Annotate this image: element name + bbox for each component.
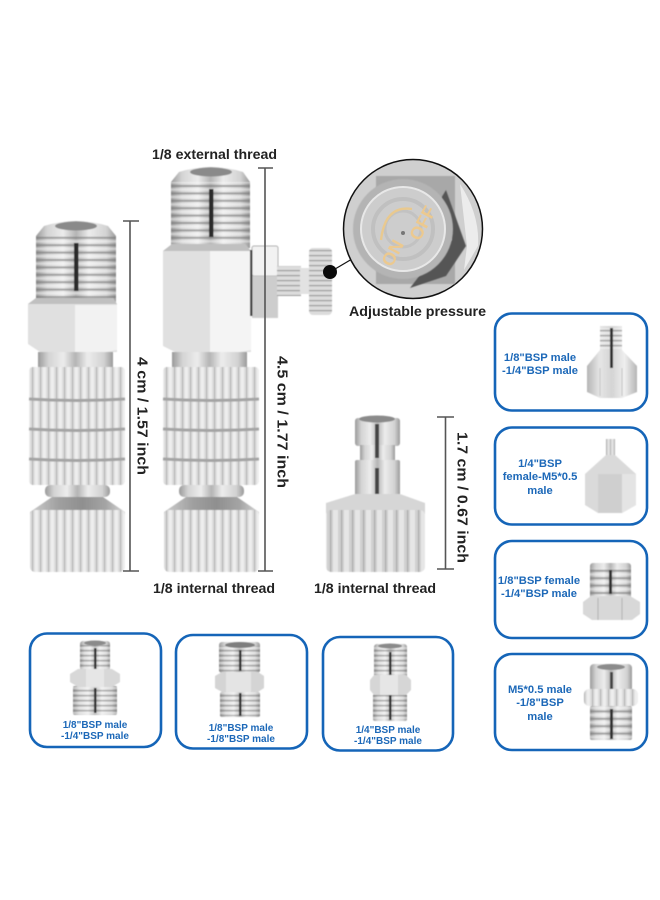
fitting [584,664,638,740]
side nut [250,246,278,318]
panel: 1/8 male to 1/4 male, right top [495,314,647,410]
label: left internal thread: 1/8 internal thread [153,581,275,596]
nipple fitting [70,640,120,715]
panel: bottom 1/4 male to 1/4 male [323,637,453,750]
lens [344,160,482,298]
connector: 4.5 cm with pressure valve [163,167,332,572]
panel: 1/8 male to 1/4 male, right top: -1/4"BSP male [502,365,578,377]
label: 1/8 external thread: 1/8 external thread [152,147,277,162]
panel: 1/8 female to 1/4 male [495,541,647,638]
text: M5*0.5 male [508,684,572,696]
text: 1/8"BSP male [504,352,576,364]
panel: bottom 1/8 male to 1/4 male [30,634,161,747]
knurled body and knob [29,352,125,572]
dimension line: 1.7 cm [437,417,454,569]
panel: 1/8 female to 1/4 male: -1/4"BSP male [501,588,577,600]
threaded top [171,167,250,248]
leader dot [323,259,352,279]
label: plug internal thread: 1/8 internal thread [314,581,436,596]
dimension text: 4.5 cm: 4.5 cm / 1.77 inch [274,356,290,488]
panel: M5 male to 1/8 male: -1/8"BSP [516,697,564,709]
panel: 1/4 female to M5 male [495,428,647,524]
fitting [587,326,637,398]
text: 1/8"BSP male [63,720,128,731]
nipple fitting [370,644,411,721]
panel: M5 male to 1/8 male [495,654,647,750]
text: 1/4"BSP [518,458,562,470]
panel: bottom 1/8 male to 1/4 male: -1/4"BSP male [61,731,129,742]
hex nut [28,298,117,352]
panel: 1/4 female to M5 male: female-M5*0.5 [503,471,577,483]
dimension text: 1.7 cm: 1.7 cm / 0.67 inch [454,432,470,563]
panel: bottom 1/8 male to 1/8 male [176,635,307,748]
connector: 4 cm quick release [28,221,125,572]
callout: pressure dial zoom [323,160,482,298]
text: 1/8"BSP male [209,723,274,734]
side screw [277,266,310,296]
fitting [583,563,640,620]
threaded top [36,221,116,302]
dimension line: 4 cm [123,221,139,571]
dial ON: ON [378,237,408,270]
fitting [585,439,636,513]
text: 1/8"BSP female [498,575,580,587]
connector: 1.7 cm plug [326,416,425,572]
dial OFF: OFF [405,203,440,244]
text: 1/4"BSP male [356,725,421,736]
panel: bottom 1/8 male to 1/8 male: -1/8"BSP male [207,734,275,745]
panel: M5 male to 1/8 male: male [527,711,553,723]
panel: 1/4 female to M5 male: male [527,485,553,497]
hex body [163,244,251,352]
side knob [309,248,332,315]
panel: bottom 1/4 male to 1/4 male: -1/4"BSP male [354,736,422,747]
dimension text: 4 cm: 4 cm / 1.57 inch [134,357,150,475]
dial arrow [381,209,412,240]
dimension line: 4.5 cm [258,168,273,571]
label: Adjustable pressure: Adjustable pressure [349,304,486,319]
nipple fitting [215,642,264,717]
